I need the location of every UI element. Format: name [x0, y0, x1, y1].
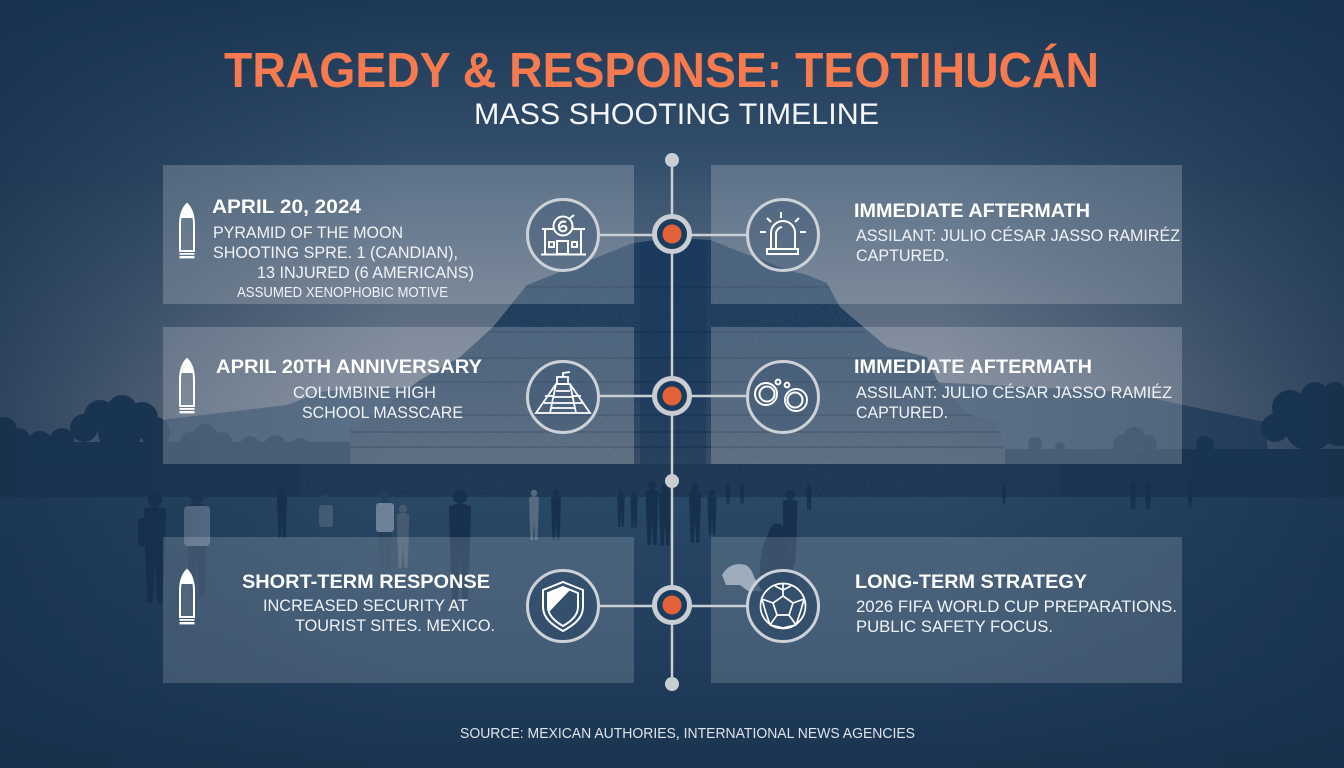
panel: long-term strategy — [711, 537, 1182, 683]
panel body — [856, 226, 1180, 265]
sky — [0, 0, 1344, 470]
title: TRAGEDY & RESPONSE: TEOTIHUCÁN — [224, 44, 1099, 98]
panel: immediate aftermath 2 — [711, 327, 1182, 464]
panel: immediate aftermath 1 — [711, 165, 1182, 304]
panel body: SHOOTING SPRE. 1 (CANDIAN), — [213, 243, 458, 262]
panel body — [856, 383, 1172, 422]
panel body: TOURIST SITES. MEXICO. — [295, 616, 495, 635]
icon: handcuffs — [748, 362, 818, 432]
source note: SOURCE: MEXICAN AUTHORIES, INTERNATIONAL NEWS AGENCIES — [460, 726, 915, 742]
panel body: ASSILANT: JULIO CÉSAR JASSO RAMIÉZ — [856, 383, 1172, 402]
panel: short-term response — [163, 537, 634, 683]
tree line right — [1005, 382, 1344, 470]
panel body: SCHOOL MASSCARE — [302, 403, 463, 422]
panel: april 20th anniversary — [163, 327, 634, 464]
panel body: COLUMBINE HIGH — [293, 383, 436, 402]
icon: soccer ball — [748, 570, 818, 642]
icon: bullet — [180, 204, 194, 258]
timeline spine — [665, 153, 679, 691]
panel heading: LONG-TERM STRATEGY — [855, 572, 1087, 593]
panel body: PYRAMID OF THE MOON — [213, 223, 403, 242]
panel body: CAPTURED. — [856, 246, 949, 265]
panel body: PUBLIC SAFETY FOCUS. — [856, 617, 1053, 636]
visitors — [138, 481, 1192, 603]
visitor in white shirt — [184, 489, 210, 597]
icon: building with spiral — [528, 200, 598, 270]
panel body — [293, 383, 463, 422]
icon: bullet — [180, 359, 194, 413]
panel body: ASSILANT: JULIO CÉSAR JASSO RAMIRÉZ — [856, 226, 1180, 245]
panel body: INCREASED SECURITY AT — [263, 596, 468, 615]
panel body — [856, 597, 1177, 636]
panel body — [213, 223, 474, 301]
panel heading: SHORT-TERM RESPONSE — [242, 572, 490, 593]
panel heading: IMMEDIATE AFTERMATH — [854, 201, 1090, 222]
visitor in jeans — [319, 495, 333, 556]
icon: alarm siren — [748, 200, 818, 270]
panel body: CAPTURED. — [856, 403, 948, 422]
pyramid stone grain and terraces — [340, 235, 1020, 470]
panel: april 20 2024 — [163, 165, 634, 304]
panel heading: IMMEDIATE AFTERMATH — [854, 357, 1092, 378]
icon: shield — [528, 570, 598, 642]
panel heading: APRIL 20, 2024 — [212, 197, 361, 218]
panel body: 2026 FIFA WORLD CUP PREPARATIONS. — [856, 597, 1177, 616]
node row 1 — [598, 216, 747, 252]
visitor in pale shirt — [376, 492, 394, 568]
panel heading: APRIL 20TH ANNIVERSARY — [216, 357, 482, 378]
panel body: ASSUMED XENOPHOBIC MOTIVE — [237, 285, 448, 301]
subtitle: MASS SHOOTING TIMELINE — [474, 98, 879, 131]
visitor with backpack — [138, 492, 166, 603]
icon: bullet — [180, 570, 194, 624]
distant hills — [160, 382, 1270, 470]
pyramid — [350, 238, 1005, 465]
panel body: 13 INJURED (6 AMERICANS) — [257, 263, 474, 282]
node row 3 — [598, 588, 747, 622]
lower wall — [0, 464, 1344, 500]
icon: stepped pyramid — [528, 362, 598, 432]
node row 2 — [598, 378, 747, 414]
central stair — [640, 238, 706, 470]
panel body — [263, 596, 495, 635]
plaza ground — [0, 497, 1344, 768]
tree line left — [0, 395, 360, 470]
